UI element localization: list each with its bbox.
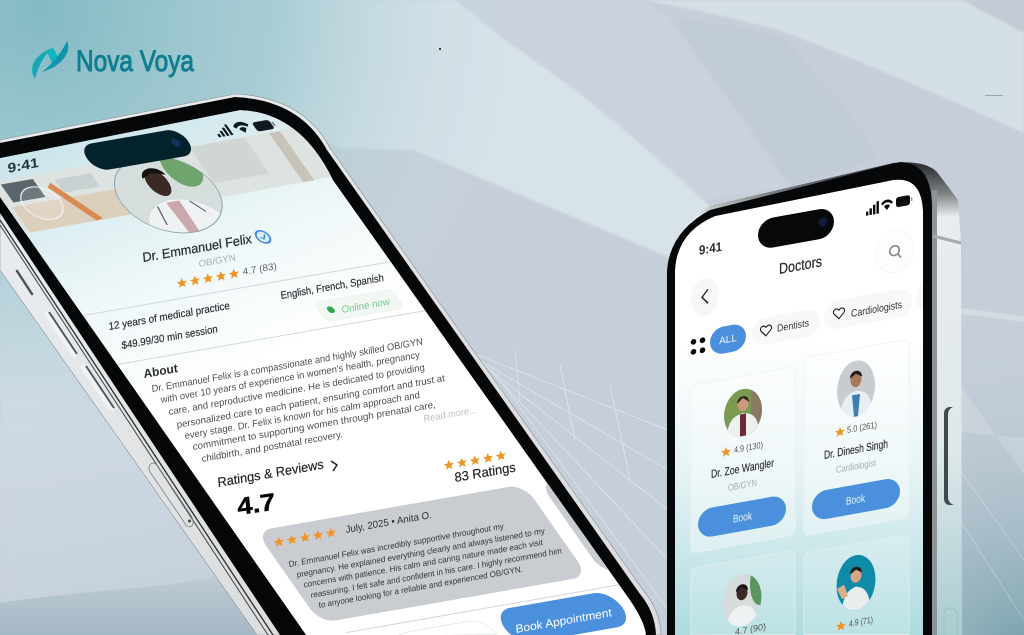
name: Dinesh: Dr. Dinesh Singh xyxy=(824,439,888,462)
review text: Dr. Emmanuel Felix was incredibly supportive throughout my xyxy=(288,521,505,569)
time: 9:41 xyxy=(7,155,40,176)
screen text xyxy=(7,155,613,635)
price: $49.99/30 min session xyxy=(121,323,218,352)
rating stars xyxy=(176,268,240,288)
left phone screen xyxy=(0,100,698,635)
dynamic island xyxy=(84,130,191,170)
ratings heading: Ratings & Reviews xyxy=(217,456,325,490)
review text: to anyone looking for a reliable and experienced OB/GYN. xyxy=(318,564,523,610)
icon: logo swoosh xyxy=(32,41,68,79)
next review card xyxy=(546,482,609,570)
filter: all: ALL xyxy=(719,333,737,347)
icon: chevron xyxy=(331,461,337,471)
back button xyxy=(691,275,719,318)
rating: doctor four: 4.9 (71) xyxy=(849,615,873,629)
portrait: Dinesh xyxy=(834,354,879,423)
rating value: 4.7 (83) xyxy=(242,261,277,278)
screen shapes xyxy=(0,120,626,635)
card: Dr. Zoe Wangler xyxy=(691,367,795,553)
card: Dr. Dinesh Singh xyxy=(804,339,909,536)
name: Zoe: Dr. Zoe Wangler xyxy=(711,458,774,481)
review meta: July, 2025 • Anita O. xyxy=(345,510,432,536)
rating: Zoe xyxy=(721,440,763,457)
about text xyxy=(151,337,446,465)
specialty: Zoe: OB/GYN xyxy=(728,478,757,494)
right phone xyxy=(667,162,962,635)
book button: Dinesh xyxy=(812,477,900,522)
portrait: Zoe xyxy=(721,382,766,445)
right phone body xyxy=(667,162,962,635)
about text: Dr. Emmanuel Felix is a compassionate and highly skilled OB/GYN xyxy=(151,337,423,395)
about heading: About xyxy=(143,361,178,381)
review stars xyxy=(273,527,337,547)
right phone lower button xyxy=(944,608,957,635)
online status: Online now xyxy=(341,297,391,316)
about text: commitment to supporting women through prenatal care, xyxy=(192,400,436,453)
specialty: OB/GYN xyxy=(198,253,236,270)
search button xyxy=(876,227,914,276)
online dot xyxy=(326,306,335,314)
book appointment button xyxy=(500,593,626,635)
filter: dentists: Dentists xyxy=(777,318,809,335)
logo: Nova Voya xyxy=(32,41,194,79)
languages: English, French, Spanish xyxy=(280,272,384,302)
ratings count: 83 Ratings xyxy=(454,459,517,485)
filter: cardiologists: Cardiologists xyxy=(851,299,902,320)
left phone side buttons xyxy=(17,271,115,412)
about text: with over 10 years of experience in women's health, pregnancy xyxy=(159,350,420,406)
rating score: 4.7 xyxy=(236,489,277,521)
review text: reassuring. I felt safe and confident in his care. I highly recommend him xyxy=(310,545,562,600)
icon: grid xyxy=(691,337,705,355)
card: doctor four xyxy=(804,534,909,635)
filter: all xyxy=(710,322,746,356)
portrait: doctor four xyxy=(834,548,879,617)
review text: concerns with patience. His calm and caring nature made each visit xyxy=(303,537,544,589)
doctor portrait xyxy=(116,158,222,232)
screen title: Doctors xyxy=(779,253,822,278)
filter: next xyxy=(916,277,956,313)
review text: pregnancy. He explained everything clearly and always listened to my xyxy=(296,525,546,579)
rating: Dinesh: 5.0 (261) xyxy=(847,420,877,435)
brand name: Nova Voya xyxy=(76,45,194,78)
ratings stars xyxy=(443,450,507,470)
experience: 12 years of medical practice xyxy=(108,300,230,333)
rating: Dinesh xyxy=(835,420,877,437)
secondary button outline xyxy=(398,620,497,635)
name: Dr. Emmanuel Felix xyxy=(142,231,253,265)
dynamic island xyxy=(758,209,834,248)
card: doctor three xyxy=(691,550,795,635)
book button: Dinesh: Book xyxy=(846,493,865,508)
SIM tray xyxy=(149,463,193,527)
rating: Zoe: 4.9 (130) xyxy=(734,440,763,455)
book button: Zoe: Book xyxy=(733,510,752,526)
filter: dentists xyxy=(752,307,820,347)
about text: care, and reproductive medicine. He is dedicated to providing xyxy=(168,362,425,418)
specialty: Dinesh: Cardiologist xyxy=(836,458,876,476)
review text xyxy=(288,521,562,610)
time: 9:41 xyxy=(699,239,722,258)
about text: personalized care to each patient, ensuring comfort and trust at xyxy=(176,373,446,431)
status icons xyxy=(217,120,276,138)
right phone screen xyxy=(675,180,923,635)
filter: cardiologists xyxy=(824,287,912,331)
online status pill xyxy=(314,289,405,322)
about text: every stage. Dr. Felix is known for his calm approach and xyxy=(184,390,420,442)
book button: Zoe xyxy=(698,494,786,539)
about text: childbirth, and postnatal recovery. xyxy=(201,429,343,465)
icon: verified badge xyxy=(254,230,272,244)
read more link: Read more... xyxy=(423,405,477,425)
left phone body xyxy=(0,94,661,635)
review card xyxy=(256,484,588,623)
banner photo xyxy=(0,128,332,234)
status icons xyxy=(866,194,912,216)
right phone side button xyxy=(944,407,954,505)
left phone xyxy=(0,94,698,635)
avatar ring xyxy=(114,158,223,234)
portrait: doctor three xyxy=(721,559,770,635)
